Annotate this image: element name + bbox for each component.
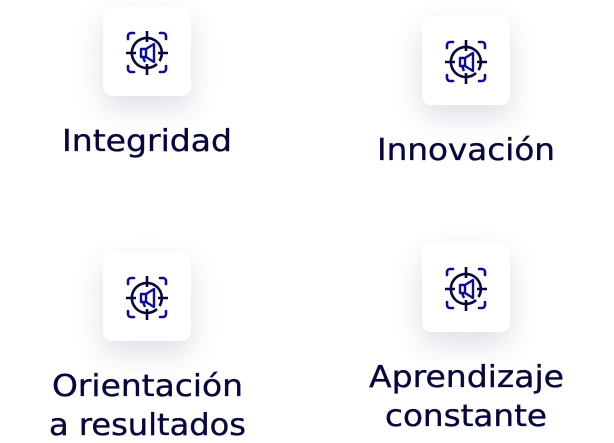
icon card: Orientación a resultados — [103, 252, 191, 341]
label: Integridad: Integridad — [62, 124, 232, 159]
label: Orientación a resultados: Orientación — [52, 369, 243, 404]
icon card: Innovación — [422, 16, 510, 105]
panel: Integridad — [62, 21, 232, 159]
panel: Innovación — [377, 30, 555, 168]
label: Orientación a resultados — [49, 369, 246, 443]
panel: Orientación a resultados — [49, 266, 246, 443]
label: Aprendizaje constante: Aprendizaje — [369, 360, 564, 395]
panel: Aprendizaje constante — [369, 257, 564, 434]
icon card: Aprendizaje constante — [422, 243, 510, 332]
label: Aprendizaje constante: constante — [385, 399, 547, 434]
label: Orientación a resultados: a resultados — [49, 408, 246, 443]
label: Aprendizaje constante — [369, 360, 564, 434]
icon card: Integridad — [103, 7, 191, 96]
label: Innovación: Innovación — [377, 133, 555, 168]
